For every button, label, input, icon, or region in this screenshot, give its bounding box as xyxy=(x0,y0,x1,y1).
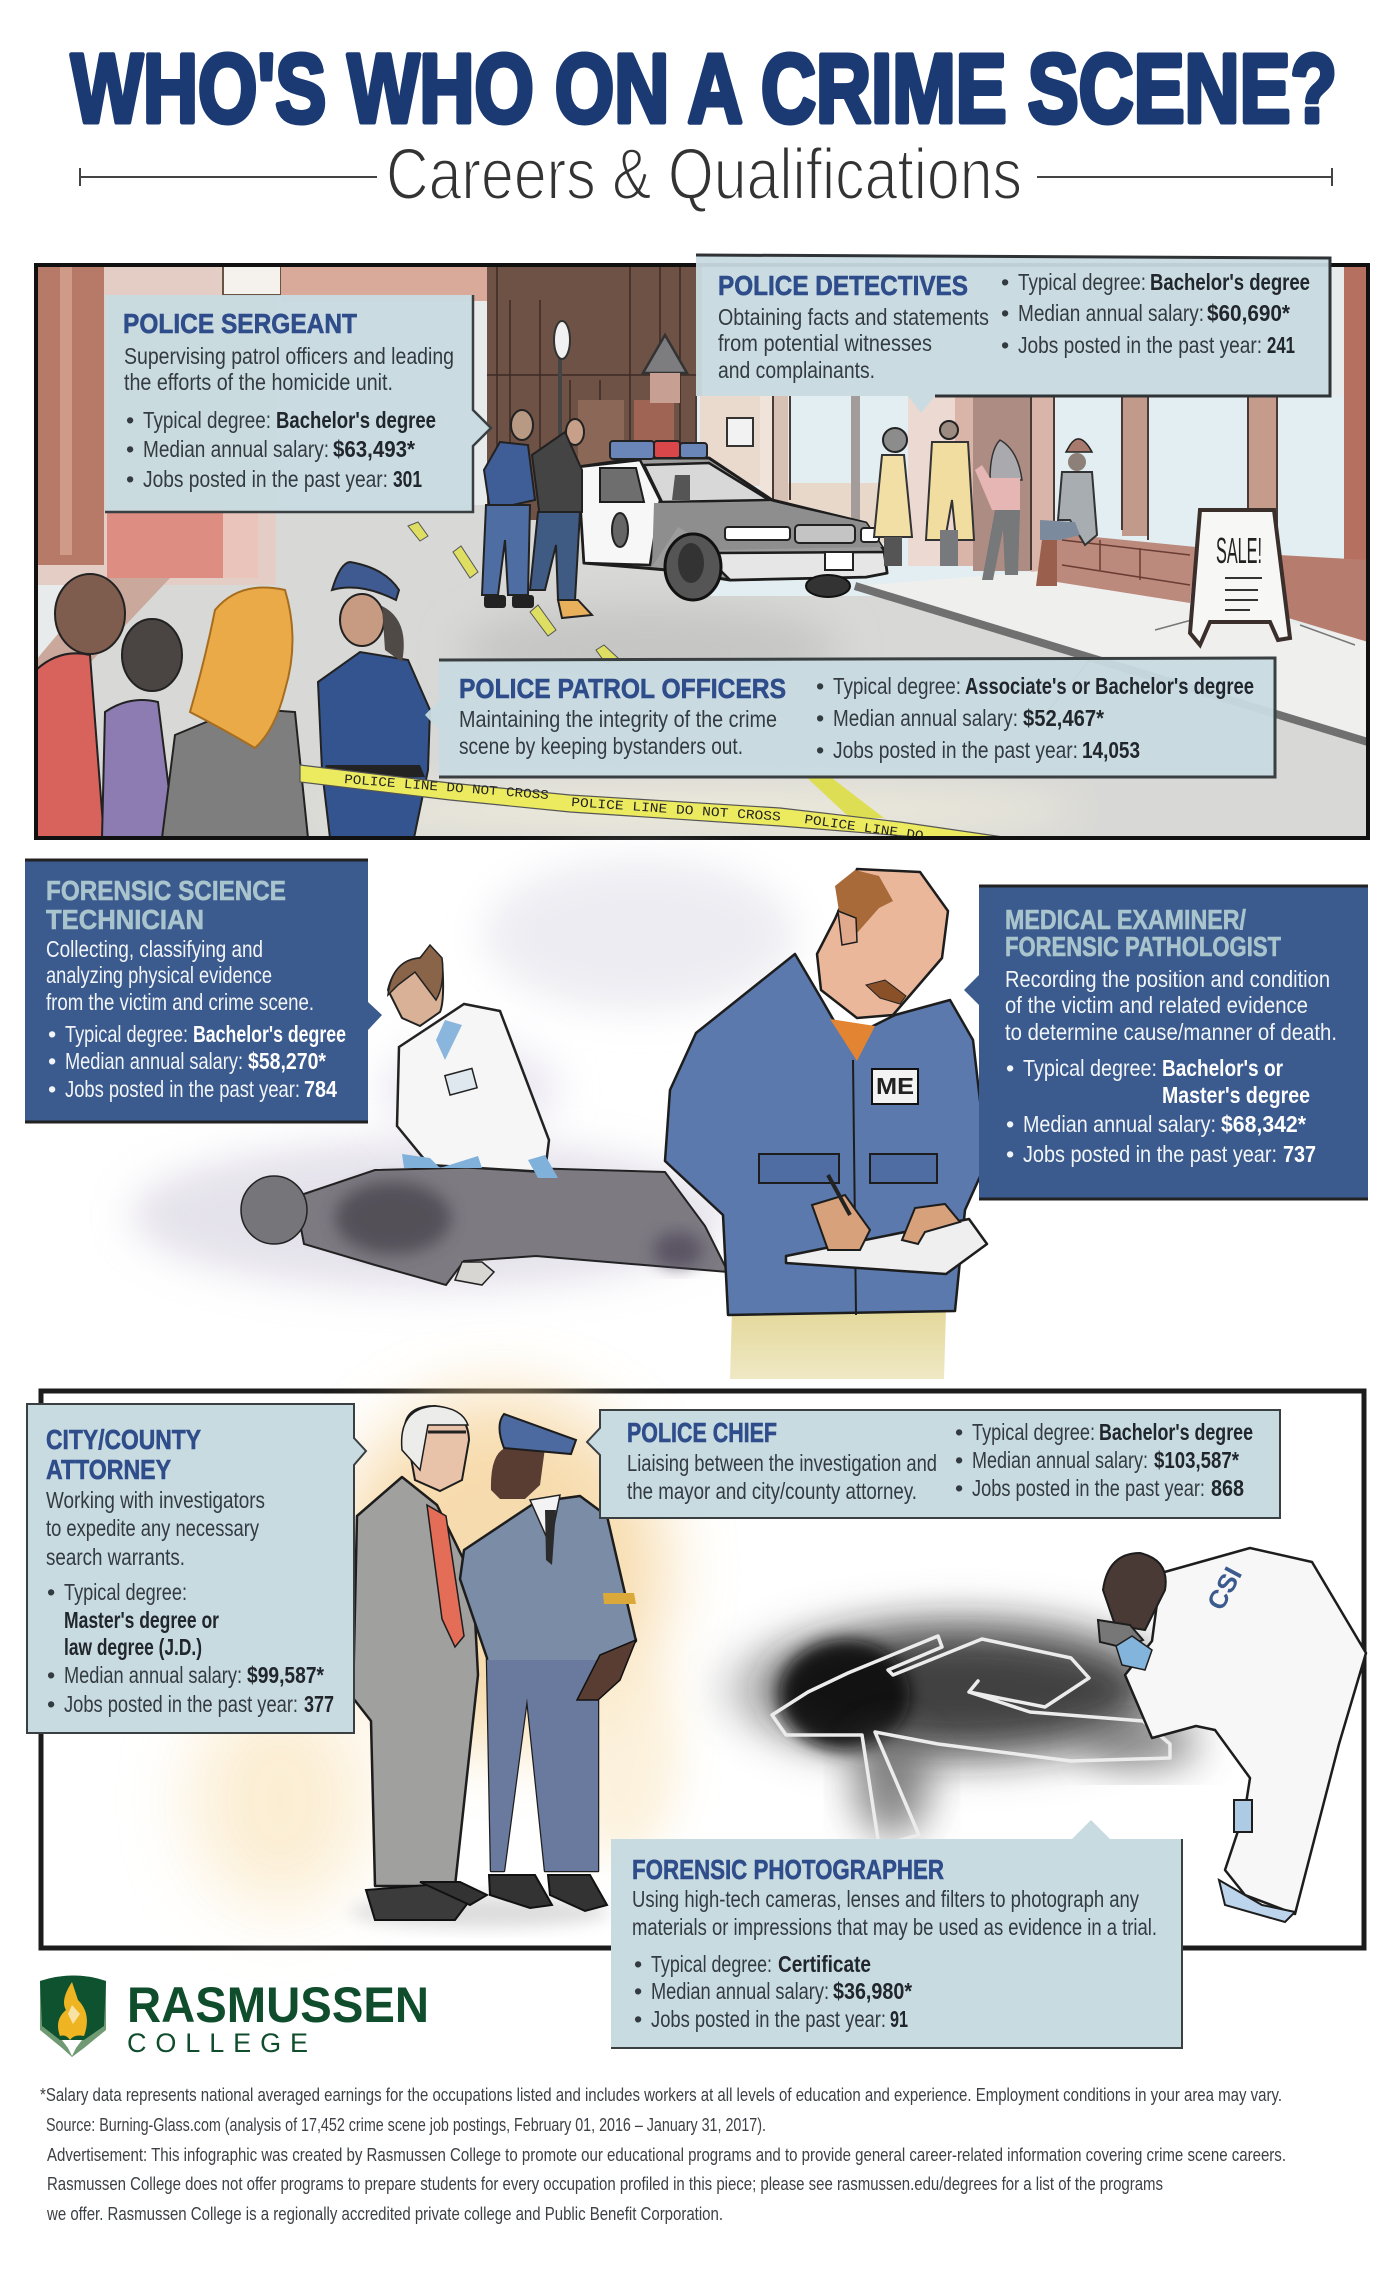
stats: 868 xyxy=(1211,1475,1244,1501)
sale sign xyxy=(1190,510,1290,645)
description: Collecting, classifying and xyxy=(46,936,263,962)
footnotes: we offer. Rasmussen College is a regionally accredited private college and Public Benefit Corporation. xyxy=(46,2203,723,2224)
police tape: POLICE LINE DO xyxy=(803,812,925,844)
stats: • xyxy=(1001,332,1009,358)
stats: Bachelor's degree xyxy=(1150,269,1310,295)
description: of the victim and related evidence xyxy=(1005,992,1308,1018)
description xyxy=(718,304,989,383)
chief xyxy=(460,1496,636,1871)
stats: 241 xyxy=(1267,332,1295,358)
stats: $52,467* xyxy=(1023,705,1105,731)
description xyxy=(46,936,314,1015)
stats: • xyxy=(816,705,824,731)
stats: Jobs posted in the past year: xyxy=(65,1076,300,1102)
heading: POLICE PATROL OFFICERS xyxy=(459,673,786,704)
witnesses xyxy=(874,421,1097,586)
stats: • xyxy=(48,1076,56,1102)
panel: office scene frame xyxy=(41,1391,1364,1948)
description: Liaising between the investigation and xyxy=(627,1450,937,1476)
description: and complainants. xyxy=(718,357,875,383)
police car xyxy=(578,441,887,600)
stats: $103,587* xyxy=(1154,1447,1240,1473)
police tape: POLICE LINE DO NOT CROSS xyxy=(571,795,781,825)
heading: ATTORNEY xyxy=(46,1454,171,1485)
stats: • xyxy=(48,1021,56,1047)
heading: MEDICAL EXAMINER/ xyxy=(1005,904,1246,935)
stats: Median annual salary: xyxy=(1023,1111,1216,1137)
description: Supervising patrol officers and leading xyxy=(124,343,454,369)
stats: Jobs posted in the past year: xyxy=(1018,332,1262,358)
clipboard and hands xyxy=(786,1219,987,1274)
description: analyzing physical evidence xyxy=(46,962,272,988)
storefronts xyxy=(696,265,1368,640)
footnotes: Source: Burning-Glass.com (analysis of 17,452 crime scene job postings, February 01, 2016 – January 31, 2017). xyxy=(46,2114,766,2135)
stats: $63,493* xyxy=(333,436,416,462)
stats: 301 xyxy=(393,466,422,492)
stats: • xyxy=(47,1579,55,1605)
illustration: CSI investigator xyxy=(1098,1548,1366,1922)
heading xyxy=(46,875,286,935)
illustration: medical examiner: ME xyxy=(876,1073,914,1099)
arrest: officer and suspect xyxy=(482,410,592,618)
stats: Bachelor's degree xyxy=(276,407,436,433)
panel: forensic science technician xyxy=(25,860,382,1122)
logo: Rasmussen College: COLLEGE xyxy=(127,2028,308,2058)
attorney xyxy=(353,1477,478,1886)
stats: Median annual salary: xyxy=(65,1048,243,1074)
stats: Jobs posted in the past year: xyxy=(64,1691,298,1717)
stats: Median annual salary: xyxy=(64,1662,242,1688)
stats: Typical degree: xyxy=(972,1419,1095,1445)
stats: $36,980* xyxy=(833,1978,913,2004)
panel: police chief xyxy=(587,1410,1280,1518)
stats: • xyxy=(126,407,134,433)
stats: Master's degree or xyxy=(64,1607,219,1633)
description xyxy=(627,1450,937,1504)
heading: POLICE CHIEF xyxy=(627,1417,777,1448)
description: Maintaining the integrity of the crime xyxy=(459,706,777,732)
logo: Rasmussen College: RASMUSSEN xyxy=(127,1977,429,2033)
footnotes xyxy=(40,2084,1286,2224)
stats: Typical degree: xyxy=(833,673,961,699)
stats: Jobs posted in the past year: xyxy=(1023,1141,1277,1167)
stats: • xyxy=(634,1978,642,2004)
stats: • xyxy=(48,1048,56,1074)
description: scene by keeping bystanders out. xyxy=(459,733,743,759)
stats: Certificate xyxy=(778,1951,871,1977)
jacket xyxy=(665,954,987,1315)
stats xyxy=(816,673,1254,763)
stats: • xyxy=(1006,1055,1014,1081)
stats: $68,342* xyxy=(1221,1111,1307,1137)
description xyxy=(1005,966,1337,1045)
description xyxy=(459,706,777,759)
description: to expedite any necessary xyxy=(46,1515,259,1541)
footnotes: Rasmussen College does not offer programs to prepare students for every occupation profiled in this piece; please see rasmussen.edu/degrees for a list of the programs xyxy=(47,2173,1163,2194)
stats: • xyxy=(1001,269,1009,295)
road marks xyxy=(408,522,618,664)
heading: POLICE SERGEANT xyxy=(123,308,357,339)
description: from potential witnesses xyxy=(718,330,932,356)
stats: 784 xyxy=(304,1076,337,1102)
stats: Median annual salary: xyxy=(1018,300,1204,326)
heading: TECHNICIAN xyxy=(46,904,204,935)
panel: medical examiner xyxy=(964,886,1368,1199)
stats: • xyxy=(955,1419,963,1445)
stats: • xyxy=(634,2006,642,2032)
panel: forensic photographer xyxy=(611,1820,1182,2048)
bystanders xyxy=(36,562,430,838)
description: Recording the position and condition xyxy=(1005,966,1330,992)
stats xyxy=(634,1951,913,2032)
description: the mayor and city/county attorney. xyxy=(627,1478,917,1504)
description xyxy=(632,1886,1157,1940)
heading xyxy=(1005,904,1281,962)
stats: • xyxy=(1006,1141,1014,1167)
stats xyxy=(1001,269,1310,358)
stats: law degree (J.D.) xyxy=(64,1634,202,1660)
description: from the victim and crime scene. xyxy=(46,989,314,1015)
stats: • xyxy=(126,466,134,492)
stats: • xyxy=(955,1475,963,1501)
head xyxy=(817,869,948,1018)
description: to determine cause/manner of death. xyxy=(1005,1019,1337,1045)
illustration: CSI investigator: CSI xyxy=(1201,1562,1248,1615)
police tape xyxy=(300,765,1010,844)
description: Obtaining facts and statements xyxy=(718,304,989,330)
description xyxy=(46,1487,265,1570)
stats: Bachelor's degree xyxy=(1099,1419,1253,1445)
illustration: attorney and police chief xyxy=(350,1406,636,1928)
stats: $58,270* xyxy=(248,1048,327,1074)
dark brick building xyxy=(487,265,702,525)
logo: Rasmussen College xyxy=(40,1976,429,2058)
illustration: orange wash xyxy=(190,1395,680,1910)
stats: Typical degree: xyxy=(64,1579,187,1605)
stats: Master's degree xyxy=(1162,1082,1310,1108)
stats: • xyxy=(955,1447,963,1473)
heading xyxy=(46,1424,201,1485)
panel: police patrol officers xyxy=(425,658,1275,777)
stats: • xyxy=(816,673,824,699)
stats xyxy=(47,1579,334,1717)
icon: shield with flame xyxy=(40,1976,106,2057)
stats xyxy=(955,1419,1253,1501)
stats: Median annual salary: xyxy=(143,436,329,462)
stats: Jobs posted in the past year: xyxy=(972,1475,1205,1501)
trousers xyxy=(730,1310,946,1379)
stats: Jobs posted in the past year: xyxy=(651,2006,886,2032)
stats: 14,053 xyxy=(1082,737,1140,763)
sale sign: SALE! xyxy=(1216,530,1262,571)
stats: 737 xyxy=(1283,1141,1316,1167)
illustration: medical examiner xyxy=(665,869,987,1379)
stats: Associate's or Bachelor's degree xyxy=(965,673,1254,699)
stats: • xyxy=(47,1662,55,1688)
stats: Jobs posted in the past year: xyxy=(143,466,388,492)
heading: POLICE DETECTIVES xyxy=(718,270,968,301)
road xyxy=(36,505,1368,838)
heading: FORENSIC PHOTOGRAPHER xyxy=(632,1854,944,1885)
description xyxy=(124,343,454,395)
stats: $60,690* xyxy=(1207,300,1291,326)
brick wall and sidewalk xyxy=(866,571,1362,640)
stats xyxy=(48,1021,346,1102)
stats: 377 xyxy=(304,1691,334,1717)
stats: • xyxy=(1001,300,1009,326)
description: Working with investigators xyxy=(46,1487,265,1513)
description: Using high-tech cameras, lenses and filters to photograph any xyxy=(632,1886,1139,1912)
police tape: POLICE LINE DO NOT CROSS xyxy=(344,772,549,803)
left buildings xyxy=(38,267,487,667)
panel: street scene xyxy=(36,265,1368,844)
description: materials or impressions that may be used as evidence in a trial. xyxy=(632,1914,1157,1940)
kerb xyxy=(855,586,1368,742)
description: search warrants. xyxy=(46,1544,185,1570)
stats: $99,587* xyxy=(247,1662,325,1688)
stats: Jobs posted in the past year: xyxy=(833,737,1078,763)
panel: city/county attorney xyxy=(27,1404,366,1733)
panel: police detectives xyxy=(696,255,1330,413)
stats: Typical degree: xyxy=(1018,269,1146,295)
subtitle with rules: Careers & Qualifications xyxy=(386,135,1022,215)
subtitle with rules xyxy=(80,135,1332,215)
stats xyxy=(126,407,436,492)
stats: Typical degree: xyxy=(65,1021,188,1047)
stats: • xyxy=(634,1951,642,1977)
panel: police sergeant xyxy=(105,295,491,512)
stats: • xyxy=(126,436,134,462)
stats: Median annual salary: xyxy=(972,1447,1148,1473)
stats xyxy=(1006,1055,1316,1167)
stats: Bachelor's degree xyxy=(193,1021,346,1047)
stats: Median annual salary: xyxy=(651,1978,829,2004)
illustration: chalk outline with stain xyxy=(720,1610,1200,1846)
stats: Typical degree: xyxy=(1023,1055,1157,1081)
heading: FORENSIC PATHOLOGIST xyxy=(1005,931,1281,962)
stats: 91 xyxy=(890,2006,908,2032)
stats: Typical degree: xyxy=(143,407,271,433)
stats: Bachelor's or xyxy=(1162,1055,1283,1081)
stats: Median annual salary: xyxy=(833,705,1018,731)
description: the efforts of the homicide unit. xyxy=(124,369,393,395)
stats: Typical degree: xyxy=(651,1951,772,1977)
stats: • xyxy=(816,737,824,763)
heading: FORENSIC SCIENCE xyxy=(46,875,286,906)
illustration: forensic technician and victim xyxy=(130,860,795,1290)
stats: • xyxy=(47,1691,55,1717)
heading: CITY/COUNTY xyxy=(46,1424,201,1455)
stats: • xyxy=(1006,1111,1014,1137)
